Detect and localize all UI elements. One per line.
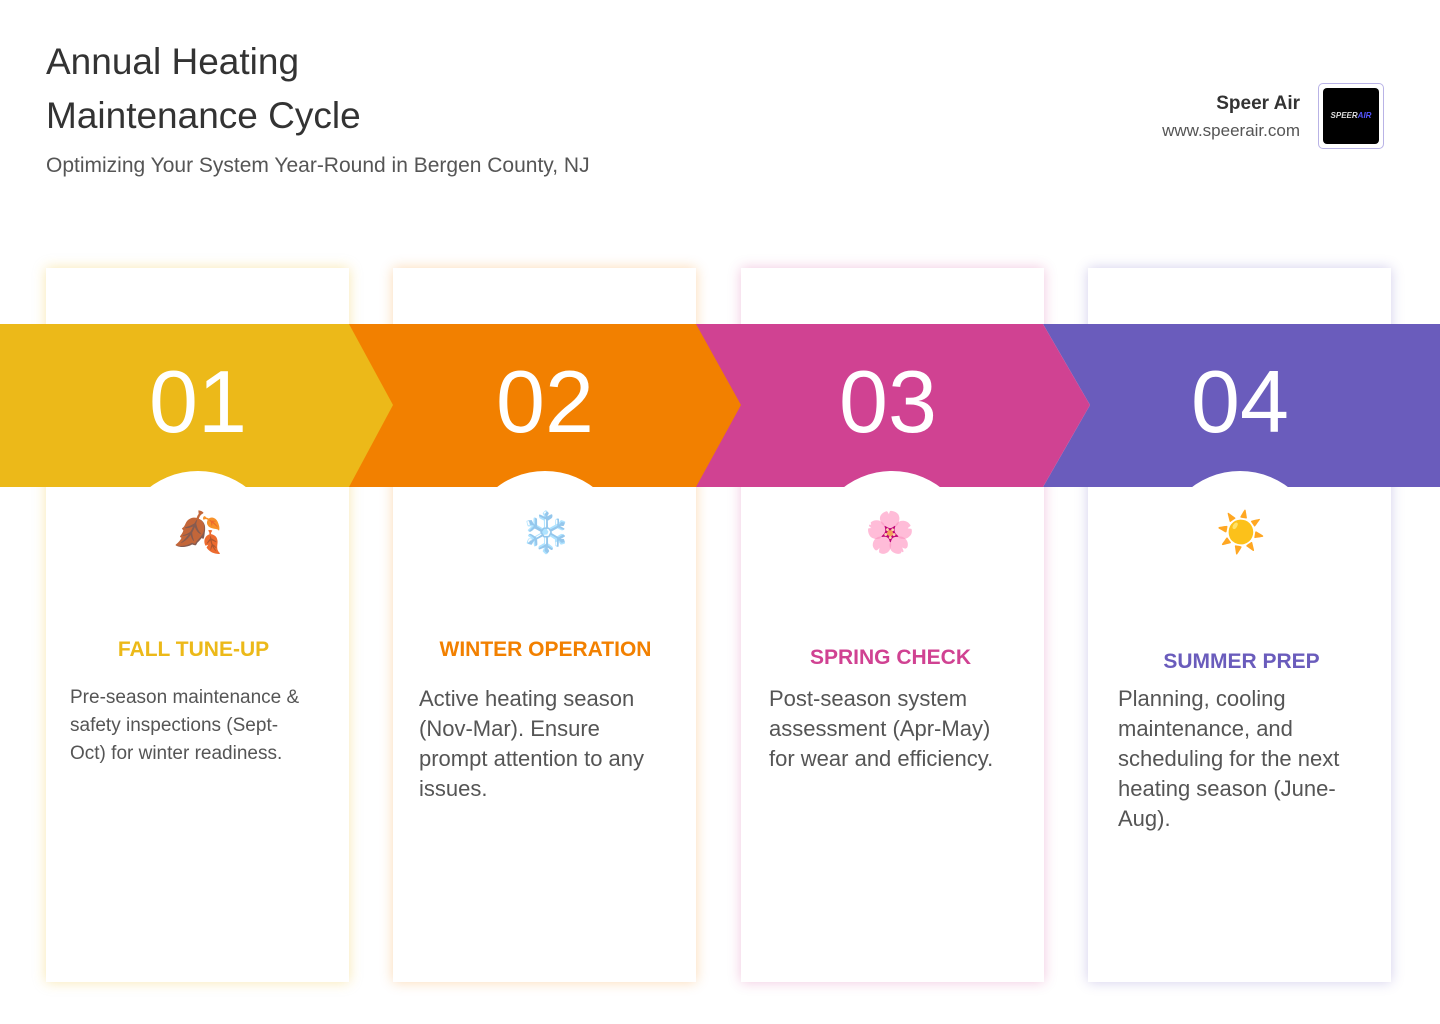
card 3	[741, 268, 1044, 982]
brand text: www.speerair.com	[1162, 121, 1300, 140]
titles: FALL TUNE-UP	[118, 638, 269, 661]
text: 04	[1191, 352, 1289, 451]
brand block	[1162, 83, 1384, 149]
subtitle: Optimizing Your System Year-Round in Bergen County, NJ	[46, 154, 590, 177]
logo	[1318, 83, 1384, 149]
logo: SPEERAIR	[1331, 111, 1371, 120]
text: Post-season system assessment (Apr-May) for wear and efficiency.	[769, 686, 993, 771]
brand text	[1162, 93, 1300, 140]
text: 03	[839, 352, 937, 451]
text: 🌸	[865, 509, 915, 556]
text: Active heating season (Nov-Mar). Ensure prompt attention to any issues.	[419, 686, 644, 801]
text: 02	[496, 352, 594, 451]
title: Annual Heating	[46, 41, 299, 82]
text: Planning, cooling maintenance, and scheduling for the next heating season (June-Aug).	[1118, 686, 1339, 831]
title: Maintenance Cycle	[46, 95, 361, 136]
body texts: Pre-season maintenance & safety inspections (Sept-Oct) for winter readiness.	[70, 687, 299, 764]
text: ❄️	[521, 509, 571, 556]
text: WINTER OPERATION	[440, 638, 651, 661]
card 1	[46, 268, 349, 982]
text: SUMMER PREP	[1163, 650, 1320, 673]
text: ☀️	[1216, 509, 1266, 556]
icons: 🍂	[173, 509, 223, 556]
text: SPRING CHECK	[810, 646, 971, 669]
card 4	[1088, 268, 1391, 982]
numbers: 01	[149, 352, 247, 451]
title	[46, 41, 361, 136]
brand text: Speer Air	[1216, 93, 1300, 114]
card 2	[393, 268, 696, 982]
